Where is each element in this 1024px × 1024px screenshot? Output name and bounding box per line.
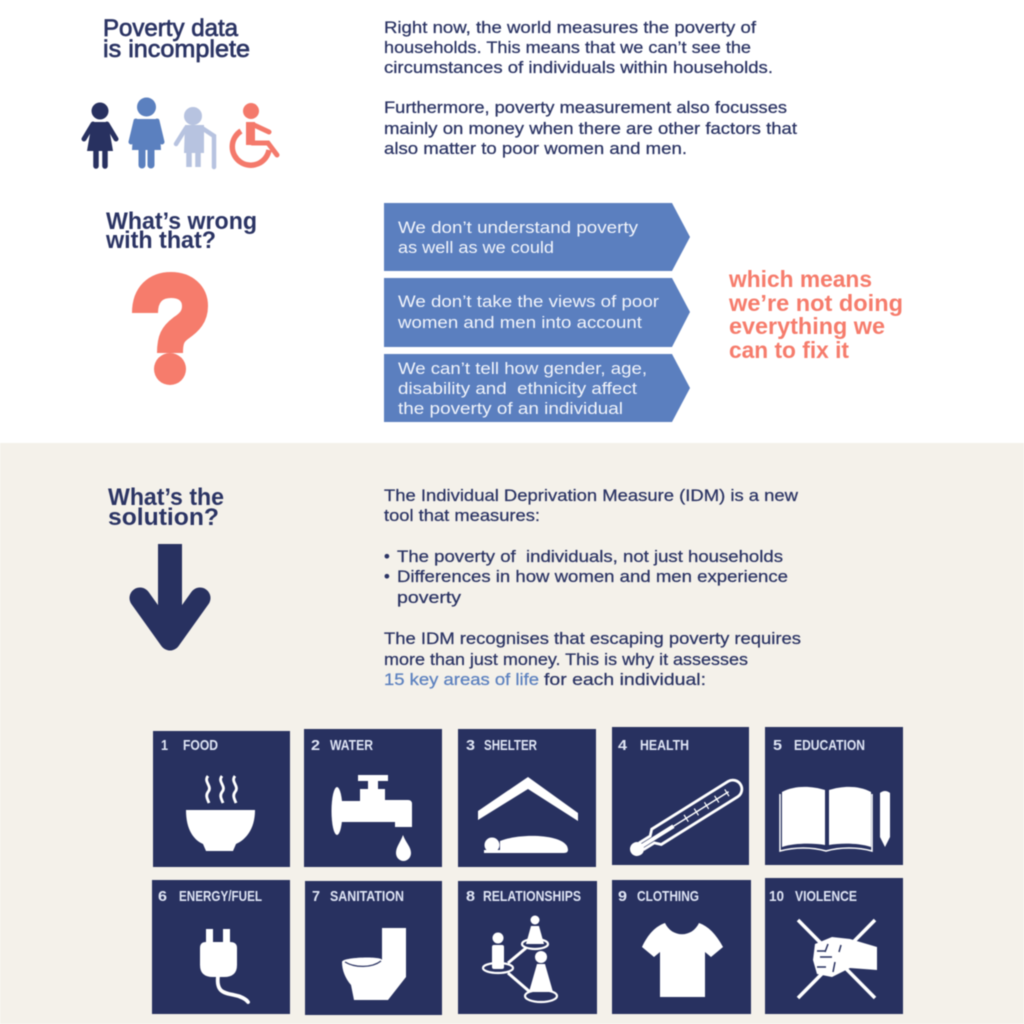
icon: down arrow — [140, 544, 200, 640]
tile: 7 sanitation: 7 — [312, 888, 320, 905]
panel: poverty data is incomplete — [84, 15, 797, 167]
tile: 4 health: 4 — [618, 737, 628, 754]
panel: solution background — [0, 443, 1024, 1024]
tile: 7 sanitation: SANITATION — [330, 888, 404, 905]
tile: 9 clothing — [612, 880, 751, 1014]
text: IDM description: The poverty of individuals, not just households — [397, 548, 783, 566]
heading: what's the solution: solution? — [108, 504, 219, 531]
tile: 10 violence — [765, 878, 903, 1014]
tile: 8 relationships — [458, 881, 597, 1014]
text: IDM description: for each individual: — [544, 671, 706, 689]
text: IDM description: • — [384, 548, 390, 566]
tile: 1 food: 1 — [161, 737, 168, 754]
callout: which means: we’re not doing — [728, 290, 903, 316]
callout: which means: which means — [728, 266, 872, 292]
tile: 6 energy/fuel: 6 — [158, 888, 167, 905]
callout: which means: everything we — [729, 313, 885, 339]
arrow: we don't understand poverty: as well as we could — [398, 238, 554, 257]
tile: 5 education — [765, 727, 903, 865]
heading: what's wrong with that — [105, 208, 257, 254]
text: household measurement explanation: mainly on money when there are other factors that — [384, 120, 797, 138]
text: IDM description: The IDM recognises that escaping poverty requires — [384, 630, 801, 648]
tile: 8 relationships: RELATIONSHIPS — [483, 888, 581, 905]
callout: which means: can to fix it — [729, 337, 849, 363]
heading: poverty data is incomplete: is incomplete — [103, 36, 250, 63]
tile: 9 clothing: CLOTHING — [637, 888, 699, 905]
heading: poverty data is incomplete — [103, 15, 250, 63]
tile: 8 relationships: 8 — [466, 888, 475, 905]
icon: question mark — [145, 285, 195, 385]
arrow: we can't tell how gender: the poverty of an individual — [398, 399, 623, 418]
tile: 6 energy/fuel — [152, 880, 290, 1014]
icon: man — [131, 98, 162, 165]
text: household measurement explanation: households. This means that we can’t see the — [384, 39, 751, 57]
tile: 3 shelter: SHELTER — [484, 737, 537, 754]
heading: poverty data is incomplete: Poverty data — [103, 15, 239, 42]
icon: elderly person with cane — [176, 107, 214, 167]
heading: what's the solution: What’s the — [108, 484, 224, 511]
tile: 10 violence: 10 — [769, 888, 784, 905]
text: household measurement explanation: also matter to poor women and men. — [384, 140, 687, 158]
tile: 3 shelter — [458, 729, 596, 867]
tile: 2 water: 2 — [311, 737, 320, 754]
tile: 4 health: HEALTH — [640, 737, 689, 754]
arrow: we don't take the views: women and men into account — [397, 313, 642, 332]
arrow: we don't take the views: We don’t take the views of poor — [398, 292, 659, 311]
callout: which means — [728, 266, 903, 363]
tile: 2 water: WATER — [330, 737, 373, 754]
tile: 3 shelter: 3 — [466, 737, 475, 754]
arrow: we can't tell how gender: We can’t tell how gender, age, — [398, 359, 647, 378]
arrow: we don't understand poverty — [384, 203, 690, 271]
text: IDM description: poverty — [397, 589, 462, 607]
text: IDM description: • — [384, 568, 390, 586]
panel: key areas of life grid — [152, 727, 903, 1015]
tile: 6 energy/fuel: ENERGY/FUEL — [179, 888, 262, 905]
heading: what's wrong with that: What’s wrong — [106, 208, 257, 235]
tile: 5 education: EDUCATION — [794, 737, 865, 754]
text: IDM description — [384, 487, 801, 689]
text: IDM description: Differences in how women and men experience — [397, 568, 788, 586]
heading: what's wrong with that: with that? — [105, 227, 216, 254]
tile: 7 sanitation — [305, 881, 442, 1015]
icon: wheelchair user — [232, 103, 277, 165]
text: household measurement explanation: circumstances of individuals within households. — [384, 59, 773, 77]
tile: 1 food — [153, 731, 290, 867]
arrow: we don't understand poverty: We don’t understand poverty — [398, 218, 639, 237]
arrow: we can't tell how gender: disability and ethnicity affect — [398, 379, 637, 398]
tile: 2 water — [304, 729, 442, 867]
tile: 10 violence: VIOLENCE — [795, 888, 857, 905]
icon: woman — [84, 102, 116, 166]
tile: 9 clothing: 9 — [618, 888, 627, 905]
text: IDM description: The Individual Deprivation Measure (IDM) is a new — [384, 487, 798, 505]
heading: what's the solution — [108, 484, 224, 531]
arrow: we don't take the views — [384, 278, 690, 347]
tile: 4 health — [612, 727, 749, 865]
panel: what's the solution — [108, 484, 801, 689]
text: IDM description: more than just money. This is why it assesses — [384, 651, 748, 669]
panel: what's wrong with that — [105, 203, 903, 422]
tile: 1 food: FOOD — [183, 737, 218, 754]
text: household measurement explanation — [384, 19, 797, 158]
text: household measurement explanation: Furthermore, poverty measurement also focusses — [384, 99, 787, 117]
text: IDM description: tool that measures: — [384, 507, 540, 525]
text: household measurement explanation: Right now, the world measures the poverty of — [384, 19, 756, 37]
tile: 5 education: 5 — [773, 737, 782, 754]
arrow: we can't tell how gender — [384, 354, 690, 422]
text: IDM description: 15 key areas of life — [384, 671, 539, 689]
